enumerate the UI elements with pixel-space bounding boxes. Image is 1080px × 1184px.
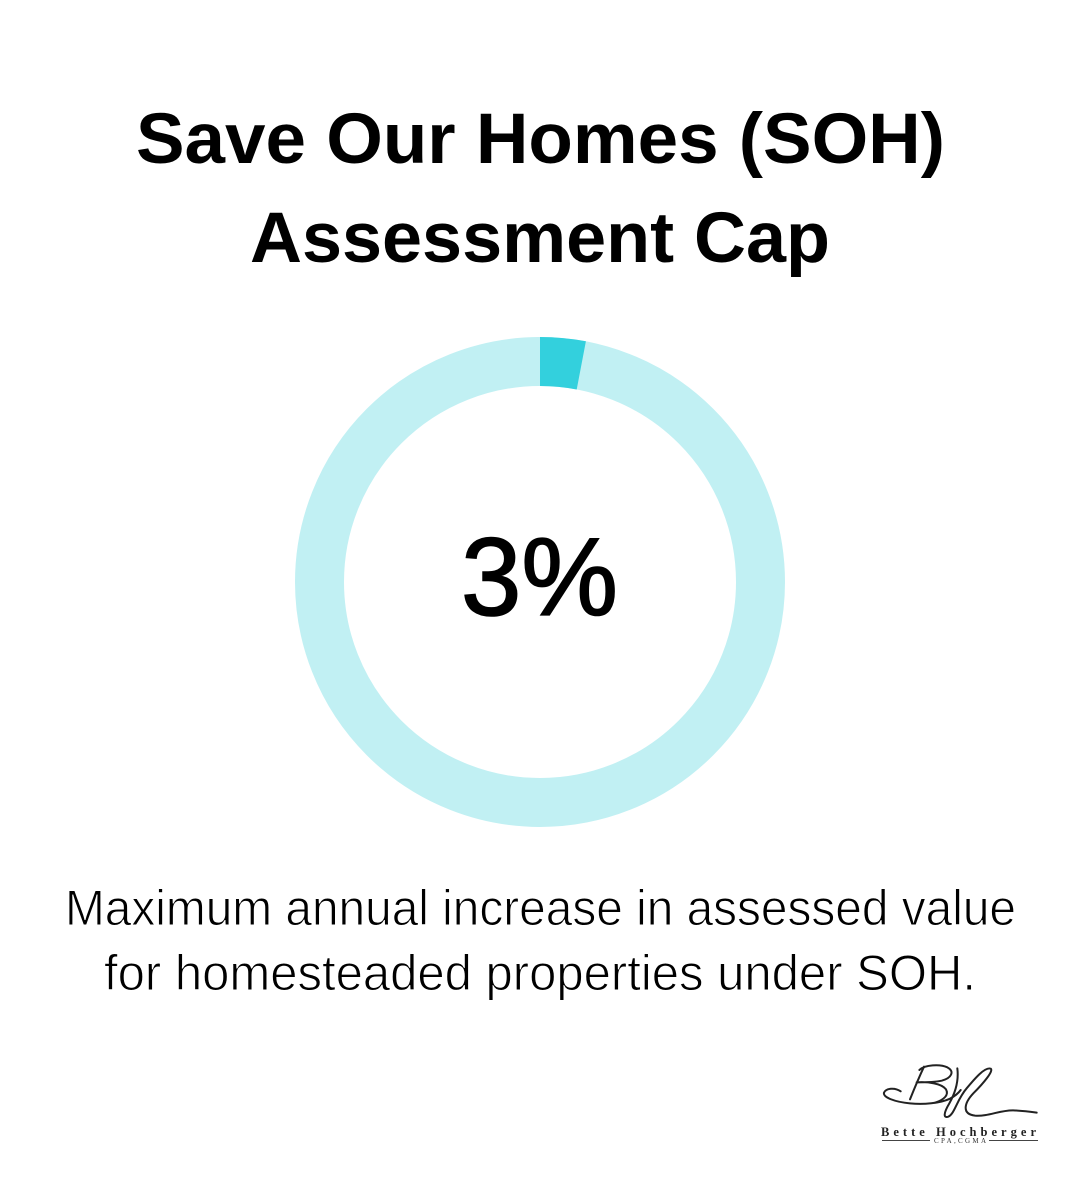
center value: 3% xyxy=(461,516,618,639)
logo signature xyxy=(884,1065,1037,1117)
logo rule right xyxy=(989,1140,1038,1141)
description xyxy=(65,880,1016,1001)
logo: Bette Hochberger xyxy=(881,1065,1038,1145)
logo rule left xyxy=(882,1140,930,1141)
title: Save Our Homes (SOH) xyxy=(136,100,945,179)
logo credentials: CPA,CGMA xyxy=(934,1137,986,1145)
donut chart xyxy=(320,337,760,802)
description: Maximum annual increase in assessed value xyxy=(65,880,1016,936)
title: Assessment Cap xyxy=(250,199,830,278)
donut 3% segment xyxy=(540,337,586,390)
title xyxy=(136,100,945,278)
logo name: Bette Hochberger xyxy=(881,1125,1036,1139)
description: for homesteaded properties under SOH. xyxy=(104,945,976,1001)
donut track xyxy=(320,362,760,802)
